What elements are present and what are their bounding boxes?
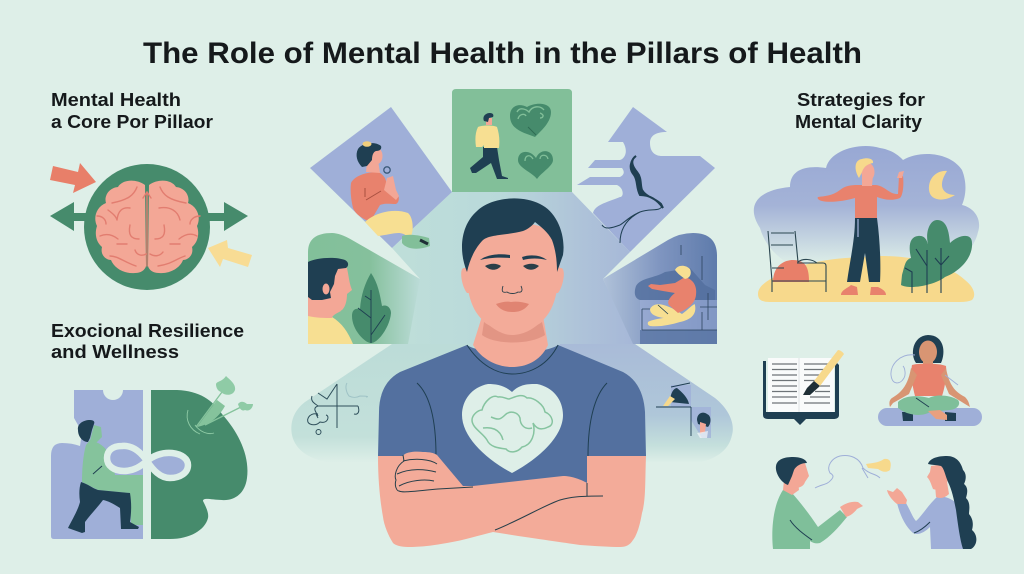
icon: left sketch marks	[308, 383, 368, 434]
heading: strategies: Mental Clarity	[795, 112, 922, 132]
icon: puzzle with figure and infinity	[51, 376, 253, 544]
figure: man in profile	[308, 258, 353, 344]
panel: right flowing abstract	[577, 107, 715, 252]
shirt	[378, 345, 646, 490]
icon: bed	[768, 231, 826, 292]
figure: woman talking	[887, 456, 976, 549]
heading: strategies: Strategies for	[797, 90, 925, 110]
heading: emotional resilience	[51, 321, 244, 362]
panel: top walk with hearts	[452, 89, 572, 192]
sleeve seams	[417, 383, 607, 456]
icon: bush	[901, 220, 972, 293]
figure: two people talking	[772, 456, 976, 549]
figure: central man	[378, 198, 646, 547]
panel: left diamond person	[310, 107, 452, 249]
icon: right small figures	[656, 383, 711, 438]
ears	[461, 268, 564, 293]
icon: arrows in puzzle	[187, 376, 253, 434]
heading: emotional resilience: and Wellness	[51, 342, 179, 362]
neck	[473, 310, 548, 367]
face	[465, 222, 560, 335]
scene: sleep and night cloud	[754, 146, 979, 302]
heading: mental health core pillar: a Core Por Pillaor	[51, 112, 213, 132]
icon: brain in circle with arrows	[50, 163, 252, 290]
figure: walking man	[470, 113, 508, 179]
nose	[502, 286, 522, 294]
heart with brain	[462, 384, 563, 473]
figure: thoughtful person	[351, 141, 430, 249]
panel: left profile with leaf	[308, 233, 420, 344]
figure: meditating person	[878, 335, 982, 426]
figure: man pushing puzzle	[68, 420, 143, 533]
eyes	[485, 264, 539, 270]
arm outlines	[395, 455, 603, 530]
icon: moon	[929, 171, 955, 200]
title: The Role of Mental Health in the Pillars of Health	[143, 37, 862, 70]
icon: infinity loop	[107, 446, 188, 478]
eyebrows	[480, 254, 547, 260]
heading: mental health core pillar	[51, 90, 213, 132]
heading: emotional resilience: Exocional Resilience	[51, 321, 244, 341]
icon: leaf hearts	[510, 104, 553, 179]
heading: strategies	[795, 90, 925, 132]
collar	[467, 345, 558, 374]
crossed arms	[378, 452, 646, 547]
mouth	[496, 302, 529, 312]
figure: standing person	[818, 158, 904, 295]
hair	[462, 198, 564, 272]
heading: mental health core pillar: Mental Health	[51, 90, 181, 110]
panel: right person on bed	[603, 233, 717, 344]
central beam and blob	[291, 192, 733, 463]
icon: leaf	[352, 273, 391, 343]
icon: journal and pen	[763, 350, 844, 425]
figure: man talking	[772, 457, 863, 549]
figure: seated person	[648, 266, 696, 326]
